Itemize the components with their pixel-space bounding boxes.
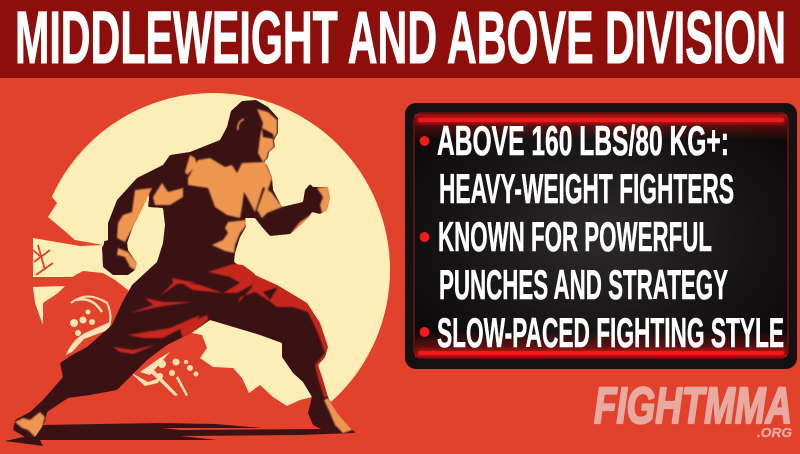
cream tree details under leg	[130, 352, 198, 396]
dark fold on thigh	[263, 287, 278, 300]
trouser highlights	[113, 264, 328, 397]
cream tree details left	[33, 245, 110, 355]
bullet 1	[420, 136, 430, 146]
bullet 2	[420, 232, 430, 242]
wrist band	[104, 243, 127, 246]
bullet 3	[420, 327, 430, 337]
illustration: fighter against sun	[0, 93, 400, 454]
skin highlights	[15, 109, 352, 437]
top red bar	[418, 117, 784, 123]
fighter silhouette	[13, 100, 357, 437]
bottom red bar	[418, 350, 784, 356]
fighter	[13, 100, 357, 437]
sun	[33, 93, 390, 447]
logo domain: .ORG	[757, 425, 792, 440]
ear	[238, 119, 244, 130]
left red wisp	[0, 190, 103, 246]
eye and brow	[262, 128, 274, 139]
header banner	[0, 0, 800, 79]
panel frame	[405, 103, 797, 369]
logo: FightMMA.org	[594, 377, 792, 440]
red hills	[0, 271, 400, 454]
info panel	[405, 103, 797, 369]
ground shadow	[5, 423, 353, 446]
